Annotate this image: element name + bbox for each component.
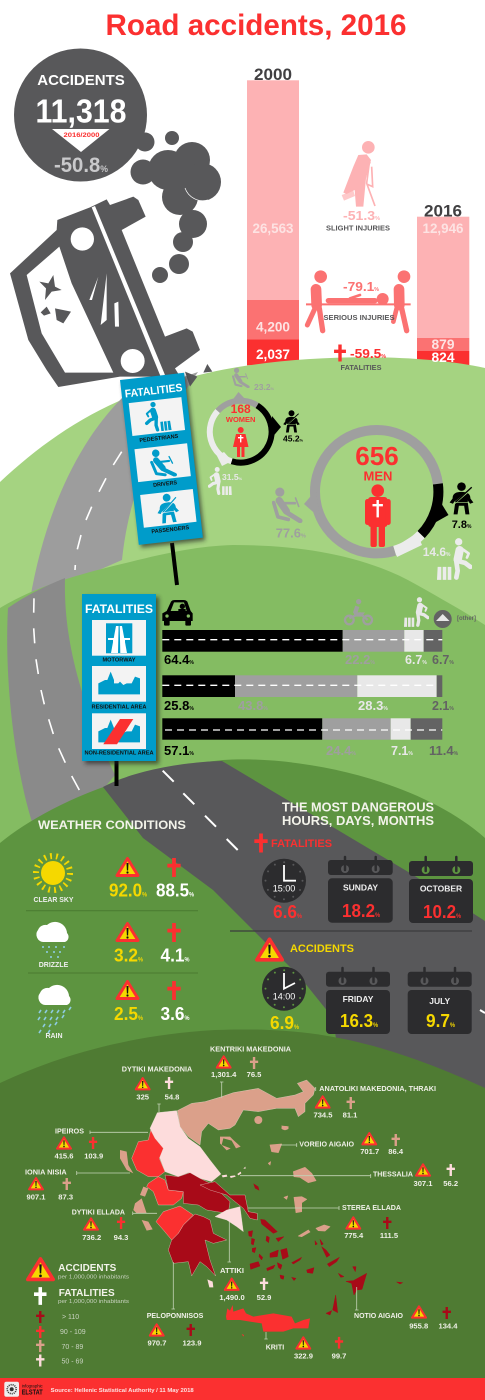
icon: clock 15:00: 15:00 <box>273 884 295 894</box>
region: Attiki: ATTIKI <box>220 1266 244 1275</box>
bar values: 824 <box>432 349 455 365</box>
bar values: 4,200 <box>256 319 290 335</box>
region: Kriti: KRITI <box>266 1342 284 1351</box>
calendar: Sunday: SUNDAY <box>343 883 378 893</box>
row dividers <box>26 911 198 973</box>
icon: stretcher bearers <box>306 270 411 331</box>
icon: man passenger <box>450 482 473 514</box>
region: Voreio Aigaio <box>299 1133 404 1156</box>
bar values: 64.4% <box>164 652 194 667</box>
calendar: October: OCTOBER <box>420 884 462 894</box>
region: Thessalia <box>373 1164 458 1188</box>
value accidents rain: 2.5% <box>114 1003 144 1024</box>
women passenger share: 45.2% <box>283 434 304 444</box>
icon: man figure <box>365 484 391 547</box>
slight injuries label: SLIGHT INJURIES <box>326 224 390 233</box>
bar values: 25.8% <box>164 698 194 713</box>
bar values: 11.4% <box>429 743 459 758</box>
label: other: [other] <box>457 616 476 622</box>
logo: ELSTAT <box>22 1387 43 1396</box>
icon: drizzle cloud <box>36 922 69 958</box>
serious injuries change: -79.1 % <box>343 279 380 294</box>
region: Attiki <box>219 1266 271 1302</box>
bar values: 28.3% <box>358 698 388 713</box>
men passenger share: 7.8% <box>452 519 472 531</box>
region: Kentriki Makedonia: 76.5 <box>247 1070 262 1079</box>
calendar: July <box>408 968 472 1034</box>
post of second sign <box>114 760 118 786</box>
region: Thessalia: 56.2 <box>443 1179 458 1188</box>
region: Sterea Ellada <box>342 1203 402 1240</box>
darkest green hill <box>0 1029 485 1400</box>
year label 2016: 2016 <box>424 202 462 221</box>
region: Notio Aigaio: 134.4 <box>438 1321 458 1330</box>
region: Dytiki Makedonia: 325 <box>136 1092 150 1101</box>
serious injuries label: SERIOUS INJURIES <box>324 313 394 322</box>
region: Kriti: 322.9 <box>294 1351 313 1360</box>
region: Kentriki Makedonia: 1,301.4 <box>211 1070 237 1079</box>
heading: most dangerous hours, days, months <box>282 801 434 828</box>
panel: pedestrians: PEDESTRIANS <box>139 434 179 444</box>
value: 11,318: 11,318 <box>36 93 126 130</box>
region: Ionia Nisia <box>25 1167 73 1201</box>
bar values: 26,563 <box>252 220 294 236</box>
subheading: accidents: ACCIDENTS <box>290 943 354 955</box>
calendar: Friday <box>326 968 390 1034</box>
icon: clock 14:00: 14:00 <box>273 991 295 1001</box>
logo <box>4 1382 43 1397</box>
calendar: October: 10.2% <box>423 901 462 922</box>
sign: fatalities by road user <box>120 372 205 548</box>
legend: 70 - 89 <box>62 1344 83 1351</box>
region: Dytiki Ellada <box>72 1207 128 1242</box>
region: Sterea Ellada: STEREA ELLADA <box>342 1203 402 1212</box>
bar values: 2.1% <box>432 699 454 713</box>
footer bar <box>0 1378 485 1400</box>
region: Sterea Ellada: 111.5 <box>380 1231 399 1240</box>
value: 6.6%: 6.6% <box>273 901 303 922</box>
region: Kentriki Makedonia <box>210 1045 292 1079</box>
region: Attiki: 1,490.0 <box>219 1293 245 1302</box>
value accidents drizzle: 3.2% <box>114 945 144 966</box>
heading: most dangerous hours, days, months: THE MOST DANGEROUS <box>282 801 434 815</box>
men driver share: 77.6% <box>276 526 306 541</box>
panel: non-residential area: NON-RESIDENTIAL AREA <box>84 751 154 757</box>
fatalities change: -59.5 % <box>350 346 387 361</box>
region: Kriti <box>266 1337 346 1360</box>
road centre dashes, middle <box>34 598 79 790</box>
icon: fatalities cross <box>254 834 268 852</box>
subheading: fatalities: FATALITIES <box>271 838 332 850</box>
label: rain: RAIN <box>45 1033 63 1040</box>
divider <box>230 930 472 932</box>
legend: per 1,000,000 inhabitants <box>58 1274 130 1280</box>
legend: per 1,000,000 inhabitants <box>58 1299 130 1305</box>
region: Anatoliki Makedonia, Thraki: 734.5 <box>313 1111 333 1120</box>
icon: woman pedestrian <box>209 467 232 495</box>
region: Thessalia: THESSALIA <box>373 1170 414 1179</box>
middle green hill <box>0 545 485 860</box>
bar values: 6.7% <box>432 653 454 667</box>
bar values: 43.8% <box>238 698 268 713</box>
sign: fatalities by area <box>82 594 159 764</box>
region: Notio Aigaio: 955.8 <box>409 1321 428 1330</box>
calendar: October <box>409 857 473 923</box>
change: -50.8%: -50.8% <box>54 154 108 177</box>
dark green hill <box>0 759 485 1100</box>
bar values <box>164 652 459 758</box>
icon: fatal cross drizzle <box>167 923 181 942</box>
region: Notio Aigaio <box>354 1306 458 1330</box>
title: Road accidents, 2016 <box>106 9 406 42</box>
region: Voreio Aigaio: 701.7 <box>360 1147 379 1156</box>
region: Anatoliki Makedonia, Thraki <box>313 1084 436 1120</box>
region: Voreio Aigaio: VOREIO AIGAIO <box>299 1140 354 1149</box>
bar values: 22.2% <box>345 652 375 667</box>
men label: MEN <box>364 469 392 484</box>
region: Anatoliki Makedonia, Thraki: 81.1 <box>343 1111 358 1120</box>
value fatalities rain: 3.6% <box>160 1003 190 1024</box>
icon: man driver <box>274 488 300 521</box>
women pedestrian share: 31.5% <box>222 472 243 482</box>
women driver share: 23.2% <box>254 382 275 392</box>
icon: person on crutch <box>342 141 375 207</box>
region: Kriti: 99.7 <box>332 1351 346 1360</box>
road centre dashes, lower <box>163 771 485 1013</box>
ring chart: men <box>304 430 448 557</box>
men pedestrian share: 14.6% <box>423 545 451 559</box>
icon: motorcycle <box>345 599 372 624</box>
legend: 50 - 69 <box>62 1359 83 1366</box>
region: Peloponnisos: 970.7 <box>147 1339 167 1348</box>
calendar: July: JULY <box>429 996 451 1006</box>
legend: 90 - 109 <box>60 1329 86 1336</box>
legend <box>28 1259 130 1366</box>
legend: FATALITIES <box>59 1287 115 1299</box>
panel: residential area: RESIDENTIAL AREA <box>92 704 146 710</box>
bar values: 879 <box>432 336 455 352</box>
icon: woman figure <box>233 427 248 457</box>
heading: most dangerous hours, days, months: HOURS, DAYS, MONTHS <box>282 814 434 828</box>
value fatalities clear sky: 88.5% <box>156 880 195 901</box>
icon: man pedestrian <box>437 538 470 580</box>
source note: Source: Hellenic Statistical Authority / 11 May 2018 <box>51 1388 194 1394</box>
panel: pedestrians <box>129 397 186 445</box>
stacked bar: non-residential <box>162 718 442 740</box>
icon: clock 14:00 <box>262 967 306 1011</box>
region: Anatoliki Makedonia, Thraki: ANATOLIKI MAKEDONIA, THRAKI <box>319 1084 436 1093</box>
icon: woman driver <box>233 368 248 387</box>
panel: passengers: PASSENGERS <box>151 525 190 535</box>
calendar: Friday: FRIDAY <box>343 994 374 1004</box>
bar values: 2,037 <box>256 346 290 362</box>
down arrow with comparison period: 2016/2000 <box>64 132 100 139</box>
bar chart: injuries and fatalities 2000 vs 2016 <box>247 80 469 365</box>
region: Ionia Nisia: 87.3 <box>58 1192 73 1201</box>
icon: overturned car <box>10 197 212 387</box>
bar values <box>252 220 464 365</box>
region: Ionia Nisia: 907.1 <box>26 1192 46 1201</box>
calendar: July: 9.7% <box>426 1010 456 1031</box>
logo: infographic <box>22 1384 43 1389</box>
panel: motorway: MOTORWAY <box>102 657 136 663</box>
stacked bar: residential <box>162 675 442 697</box>
region: Ipeiros: 103.9 <box>84 1151 103 1160</box>
calendar: Sunday: 18.2% <box>342 900 381 921</box>
panel: drivers: DRIVERS <box>153 480 178 489</box>
value accidents clear sky: 92.0% <box>109 880 148 901</box>
light green hill <box>0 357 485 720</box>
bar values: 7.1% <box>391 744 413 758</box>
region: Peloponnisos <box>147 1311 203 1348</box>
icon: woman passenger <box>283 410 300 433</box>
region: Sterea Ellada: 775.4 <box>344 1231 364 1240</box>
heading: accidents: ACCIDENTS <box>37 72 125 89</box>
region: Thessalia: 307.1 <box>413 1179 433 1188</box>
panel: motorway <box>92 620 146 663</box>
icon: other vehicles <box>434 610 452 628</box>
road centre dashes, upper <box>75 452 122 570</box>
year label 2000: 2000 <box>254 65 292 84</box>
region: Ionia Nisia: IONIA NISIA <box>25 1167 67 1176</box>
icon: car <box>162 600 193 626</box>
mainland and northern regions <box>120 1080 315 1287</box>
fatalities label: FATALITIES <box>340 365 382 372</box>
region: Dytiki Ellada: 94.3 <box>114 1233 128 1242</box>
bar values: 24.4% <box>326 743 356 758</box>
smoke <box>130 131 221 283</box>
aegean islands and crete <box>226 1126 403 1337</box>
icon: pedestrian on crossing <box>404 597 428 627</box>
value fatalities drizzle: 4.1% <box>160 945 190 966</box>
women label: WOMEN <box>226 415 255 424</box>
men count: 656 <box>355 441 399 471</box>
region: Attiki: 52.9 <box>257 1293 271 1302</box>
region: Voreio Aigaio: 86.4 <box>388 1147 404 1156</box>
icon: warning triangle clear sky <box>117 858 138 876</box>
value: 6.9%: 6.9% <box>270 1012 300 1033</box>
lower road <box>103 761 485 1100</box>
region: Dytiki Ellada: 736.2 <box>82 1233 101 1242</box>
bar values: 6.7% <box>405 653 427 667</box>
label: drizzle: DRIZZLE <box>39 962 69 969</box>
panel: drivers <box>134 443 192 491</box>
region: Dytiki Makedonia <box>122 1065 193 1101</box>
region: Kentriki Makedonia: KENTRIKI MAKEDONIA <box>210 1045 292 1054</box>
icon: warning triangle rain <box>117 982 138 998</box>
calendar: Sunday <box>328 857 393 923</box>
accidents circle <box>14 48 147 182</box>
legend: > 110 <box>62 1314 79 1321</box>
sign title: FATALITIES <box>85 604 153 616</box>
icon: accidents warning triangle <box>257 939 282 960</box>
region: Ipeiros <box>54 1126 103 1160</box>
panel: passengers <box>140 489 198 536</box>
post of first sign <box>172 543 177 585</box>
ring chart: women <box>210 392 281 466</box>
region: Notio Aigaio: NOTIO AIGAIO <box>354 1311 403 1320</box>
region: Ipeiros: IPEIROS <box>55 1126 84 1135</box>
women count: 168 <box>231 402 251 416</box>
middle road <box>7 578 115 825</box>
upper road <box>30 372 198 600</box>
panel: non-residential area <box>84 713 154 757</box>
icon: rain cloud <box>38 985 71 1033</box>
icon: clock 15:00 <box>262 859 306 903</box>
panel: residential area <box>92 666 146 710</box>
bar values: 12,946 <box>422 220 464 236</box>
icon: warning triangle drizzle <box>117 924 138 940</box>
icon: fatal cross rain <box>167 981 181 1000</box>
icon: fatalities cross <box>334 344 346 362</box>
map of Greece <box>120 1080 403 1337</box>
region: Peloponnisos: PELOPONNISOS <box>147 1311 203 1320</box>
stacked bar: motorway <box>162 630 442 652</box>
heading: weather conditions: WEATHER CONDITIONS <box>38 818 186 832</box>
legend: ACCIDENTS <box>58 1262 116 1274</box>
calendar: Friday: 16.3% <box>340 1010 379 1031</box>
icon: fatal cross clear sky <box>167 858 181 877</box>
region: Dytiki Makedonia: 54.8 <box>165 1092 179 1101</box>
icon: sun <box>36 856 70 890</box>
bar values: 57.1% <box>164 743 194 758</box>
region: Dytiki Ellada: DYTIKI ELLADA <box>72 1207 126 1216</box>
region: Peloponnisos: 123.9 <box>182 1339 202 1348</box>
connector lines <box>77 1082 371 1339</box>
slight injuries change: -51.3 % <box>343 208 381 223</box>
region: Ipeiros: 415.6 <box>54 1151 74 1160</box>
region: Dytiki Makedonia: DYTIKI MAKEDONIA <box>122 1065 193 1074</box>
label: clear sky: CLEAR SKY <box>34 897 74 904</box>
sign title: FATALITIES <box>124 382 183 401</box>
